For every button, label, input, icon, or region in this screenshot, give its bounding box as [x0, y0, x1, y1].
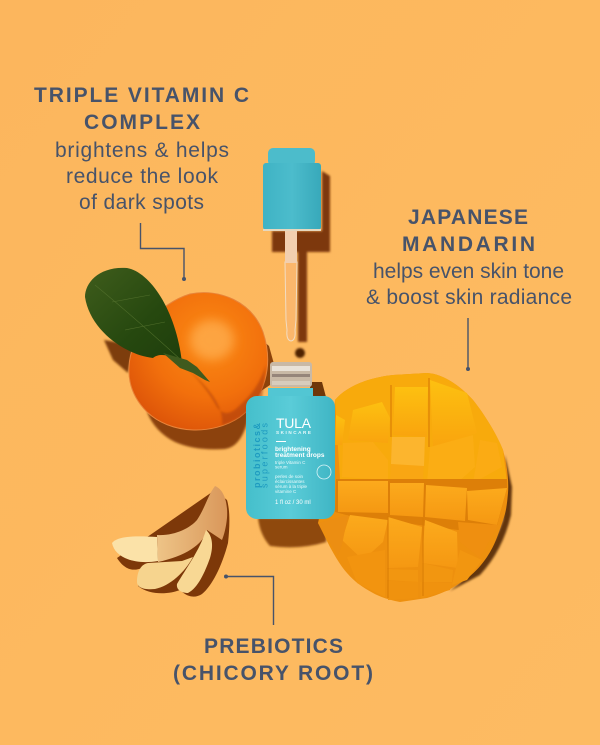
dropper cap: [263, 148, 321, 231]
chicory root: [112, 486, 229, 597]
bottle brand: TULA: [276, 415, 312, 431]
heading: triple vitamin c complex callout: reduce the look: [66, 165, 218, 188]
mango upper flesh: [335, 373, 507, 482]
bottle glass neck: [270, 362, 312, 387]
mango lower cubes: [318, 515, 498, 600]
bottle side text: superfoods: [260, 422, 270, 488]
mango upper cubes: [335, 380, 502, 483]
heading: prebiotics callout: [173, 635, 373, 685]
bottle label copy: éclaircissantes: [275, 479, 305, 484]
root shadow: [117, 490, 229, 597]
dropper glass pipette: [285, 230, 297, 341]
heading: triple vitamin c complex callout: TRIPLE VITAMIN C: [34, 84, 249, 107]
leader line: prebiotics to chicory root: [224, 574, 274, 625]
serum bottle: [246, 362, 335, 519]
mango center cube: [390, 437, 425, 482]
bottle label copy: perles de soin: [275, 474, 304, 479]
bottle cast shadow: [258, 518, 328, 547]
bottle badge: [317, 465, 331, 479]
mandarin orange: [85, 268, 274, 449]
root slice: back: [137, 557, 193, 589]
leader line: vitamin c to mandarin: [140, 223, 186, 281]
leader line: mandarin to mango: [466, 318, 470, 371]
mango crease band: [335, 479, 507, 530]
dropper shadow: [272, 171, 330, 358]
mandarin stem: [163, 353, 210, 382]
bottle brand: SKINCARE: [276, 430, 311, 435]
bottle collar: [258, 388, 326, 402]
bottle label copy: 1 fl oz / 30 ml: [275, 500, 311, 506]
bottle side text: probiotics&: [252, 422, 262, 488]
heading: japanese mandarin callout: helps even skin tone: [373, 260, 564, 283]
bottle label copy: [275, 446, 325, 506]
mandarin fruit: [129, 293, 268, 430]
mango: [310, 373, 512, 602]
leaf veins: [95, 285, 181, 360]
mandarin highlight: [190, 320, 234, 360]
heading: japanese mandarin callout: [366, 206, 572, 309]
heading: triple vitamin c complex callout: [34, 84, 249, 214]
bottle label copy: vitamine C: [275, 489, 297, 494]
heading: triple vitamin c complex callout: COMPLEX: [84, 111, 200, 134]
bottle label copy: triple Vitamin C: [275, 460, 306, 465]
root slice: right: [177, 530, 212, 593]
bottle side text: [252, 422, 270, 488]
mango cut lines: [388, 378, 429, 598]
bottle body: [246, 396, 335, 519]
heading: japanese mandarin callout: & boost skin radiance: [366, 286, 572, 309]
bottle label copy: brightening: [275, 446, 311, 453]
mandarin leaf: [85, 268, 182, 362]
heading: japanese mandarin callout: MANDARIN: [402, 233, 535, 256]
heading: prebiotics callout: PREBIOTICS: [204, 635, 343, 658]
bottle brand: [276, 415, 312, 442]
mandarin shadow: [147, 400, 250, 449]
bottle label copy: treatment drops: [275, 452, 325, 459]
heading: japanese mandarin callout: JAPANESE: [408, 206, 528, 229]
heading: triple vitamin c complex callout: brightens & helps: [55, 139, 229, 162]
root slice: long: [157, 486, 227, 562]
mango middle row of cubes: [338, 481, 507, 525]
bottle label copy: serum: [275, 464, 288, 470]
mango shadow: [450, 455, 512, 591]
mango skin: [318, 373, 508, 602]
bottle label copy: sérum à la triple: [275, 484, 308, 489]
root cut face: [112, 536, 158, 562]
heading: triple vitamin c complex callout: of dark spots: [79, 191, 204, 214]
mandarin shaded crease: [185, 365, 266, 425]
dropper: [263, 148, 321, 341]
heading: prebiotics callout: (CHICORY ROOT): [173, 662, 373, 685]
